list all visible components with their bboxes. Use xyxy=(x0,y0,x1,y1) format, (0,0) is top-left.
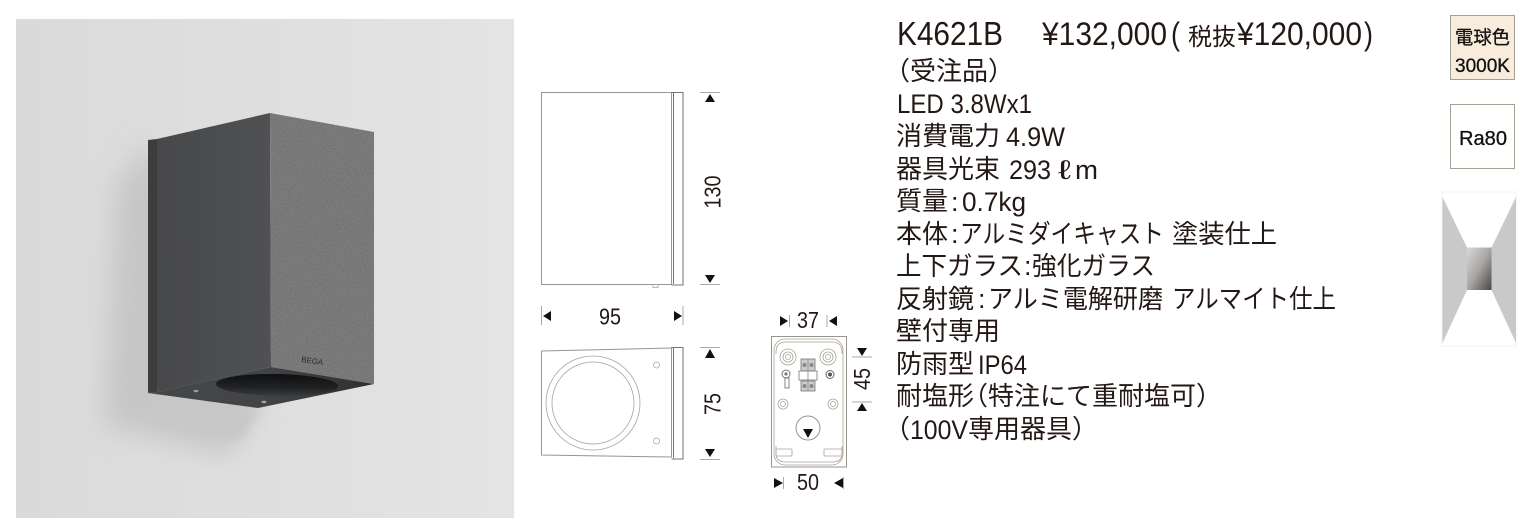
price excluding tax: 税抜 xyxy=(1188,24,1236,51)
depth dimension 75: 75 xyxy=(700,393,726,415)
depth dimension 75 xyxy=(700,349,726,457)
line: luminous flux: ℓ xyxy=(1058,155,1071,185)
line: reflector xyxy=(896,284,1336,314)
line: wall mount only: 壁付専用 xyxy=(896,316,1000,346)
specification list xyxy=(884,56,1336,445)
line: IP rating: IP64 xyxy=(978,350,1027,380)
badge: colour rendering: Ra80 xyxy=(1459,128,1507,150)
price including tax: ¥132,000 xyxy=(1041,16,1167,52)
price including tax: ( xyxy=(1171,16,1180,52)
line: reflector: アルミ電解研磨 xyxy=(988,284,1163,314)
line: 100V only: 専用器具） xyxy=(968,414,1098,444)
model number: K4621B xyxy=(897,15,1003,52)
line: luminous flux: 293 xyxy=(1009,155,1051,185)
product photo xyxy=(16,19,514,518)
dimension 37: 37 xyxy=(797,307,819,333)
line: 100V only: 100V xyxy=(910,415,968,445)
lamp shadow on wall xyxy=(104,142,262,455)
line: reflector: アルマイト仕上 xyxy=(1172,284,1336,314)
badge: colour rendering xyxy=(1450,104,1514,168)
back plate drawing xyxy=(772,307,875,495)
dimension 50: 50 xyxy=(797,469,819,495)
terminal block xyxy=(799,359,817,391)
badge: colour temperature: 3000K xyxy=(1455,55,1510,77)
dimension 37 xyxy=(780,307,837,333)
line: glass xyxy=(896,251,1155,281)
line: salt resistance: （特注にて重耐塩可） xyxy=(962,381,1222,411)
maker logo: BEGA xyxy=(301,355,324,367)
wall lamp body xyxy=(148,113,374,408)
line: power consumption: 4.9W xyxy=(1006,122,1065,152)
height dimension 130 xyxy=(700,94,726,283)
line: power consumption xyxy=(896,121,1065,152)
line: 100V only xyxy=(884,414,1098,445)
badge: colour temperature xyxy=(1450,16,1514,80)
line: body material xyxy=(896,219,1277,249)
icon: light distribution xyxy=(1442,192,1516,346)
price excluding tax: ) xyxy=(1364,16,1373,52)
badge: colour temperature: 電球色 xyxy=(1455,27,1510,48)
height dimension 130: 130 xyxy=(700,176,726,208)
line: luminous flux: m xyxy=(1075,155,1098,185)
width dimension 95 xyxy=(543,304,682,330)
line: body material: 本体 xyxy=(896,219,948,249)
dimension 45: 45 xyxy=(849,368,875,390)
lamp opening xyxy=(216,373,338,397)
dimension 50 xyxy=(774,469,844,495)
line: body material: 塗装仕上 xyxy=(1172,219,1277,249)
line: reflector: : xyxy=(978,284,986,314)
line: reflector: 反射鏡 xyxy=(896,284,974,314)
model and price heading xyxy=(897,15,1373,52)
line: glass: : xyxy=(1024,251,1032,281)
line: glass: 上下ガラス xyxy=(896,251,1023,281)
line: luminous flux xyxy=(896,154,1098,185)
line: IP rating xyxy=(896,349,1027,380)
price excluding tax: ¥120,000 xyxy=(1236,16,1362,52)
line: 100V only: （ xyxy=(884,414,910,444)
line: weight: : xyxy=(951,187,959,217)
side view drawing xyxy=(542,92,726,330)
line: weight xyxy=(896,186,1026,217)
line: body material: : xyxy=(951,219,959,249)
width dimension 95: 95 xyxy=(599,304,621,330)
line: weight: 質量 xyxy=(896,186,948,216)
line: body material: アルミダイキャスト xyxy=(960,219,1164,249)
line: weight: 0.7kg xyxy=(962,187,1026,217)
dimension 45 xyxy=(849,348,875,411)
line: IP rating: 防雨型 xyxy=(896,349,974,379)
line: made to order: （受注品） xyxy=(884,56,1014,86)
line: power consumption: 消費電力 xyxy=(896,121,1000,151)
line: glass: 強化ガラス xyxy=(1032,251,1155,281)
line: salt resistance: 耐塩形 xyxy=(896,381,974,411)
bottom view drawing xyxy=(542,348,726,460)
line: LED: LED 3.8Wx1 xyxy=(897,89,1032,119)
line: luminous flux: 器具光束 xyxy=(896,154,1000,184)
